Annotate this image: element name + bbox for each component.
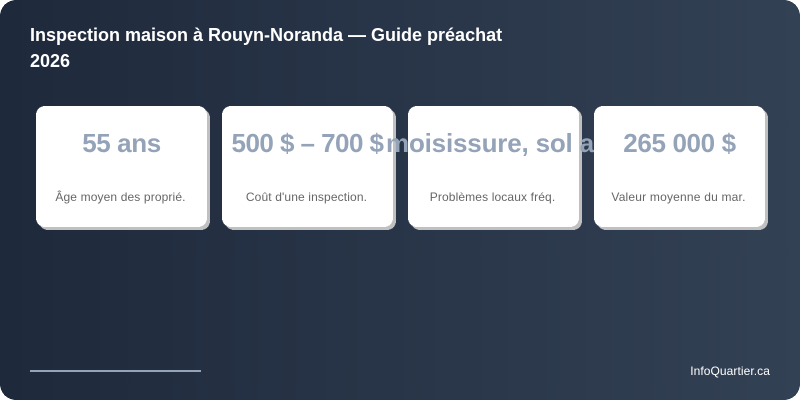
value: market value: 265 000 $: [623, 128, 736, 158]
label: inspection cost: Coût d'une inspection.: [246, 190, 367, 204]
card 4: [594, 106, 768, 230]
label: frequent problems: Problèmes locaux fréq.: [430, 190, 555, 204]
value: average age: 55 ans: [82, 128, 161, 158]
label: average age: Âge moyen des proprié.: [55, 190, 186, 204]
card 3: [408, 106, 582, 230]
card 2: [222, 106, 396, 230]
footer accent line: [30, 370, 201, 372]
title: 2026: [30, 51, 70, 71]
value: frequent problems: moisissure, sol a: [386, 128, 594, 158]
title: Inspection maison à Rouyn-Noranda — Guide préachat: [30, 25, 502, 45]
label: market value: Valeur moyenne du mar.: [611, 190, 746, 204]
card 1: [36, 106, 210, 230]
footer brand: InfoQuartier.ca: [690, 364, 770, 378]
value: inspection cost: 500 $ – 700 $: [232, 128, 383, 158]
title: [30, 25, 502, 71]
